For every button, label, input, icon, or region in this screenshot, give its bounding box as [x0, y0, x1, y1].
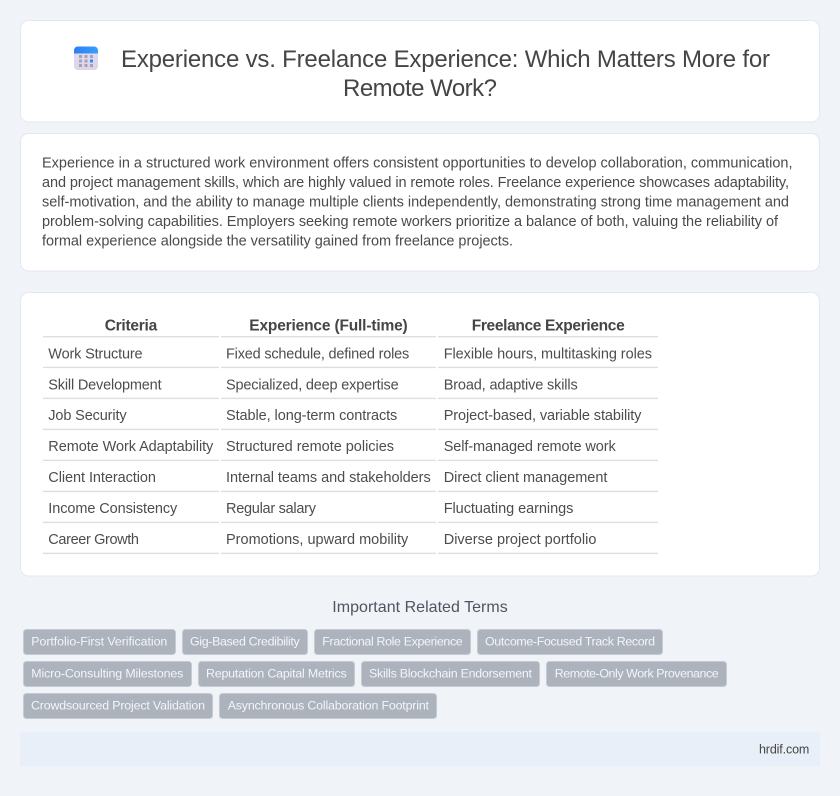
row: remote work adaptability: Remote Work Adaptability [48, 439, 214, 455]
row: client interaction: Client Interaction [48, 470, 156, 486]
row: work structure: Flexible hours, multitasking roles [444, 346, 652, 362]
row: work structure [43, 346, 658, 368]
row: work structure: Work Structure [48, 346, 143, 362]
row: career growth: Career Growth [48, 532, 139, 548]
text block: intro: and project management skills, which are highly valued in remote roles. Freelance experience showcases adaptability, [42, 175, 789, 191]
row: career growth: Promotions, upward mobility [226, 532, 409, 548]
row: income consistency: Fluctuating earnings [444, 501, 573, 517]
row: income consistency [43, 501, 658, 523]
title: Remote Work? [343, 75, 497, 102]
tag: asynchronous collaboration footprint [220, 694, 436, 718]
panel: intro paragraph [20, 134, 820, 271]
table header row: Criteria [105, 318, 158, 335]
text block: intro: self-motivation, and the ability to manage multiple clients independently, demonstrating strong time management and [42, 194, 789, 210]
panel: comparison table [20, 292, 820, 576]
text block: intro: Experience in a structured work environment offers consistent opportunities to develop collaboration, communication, [42, 156, 792, 172]
table header row: Experience (Full-time) [249, 318, 408, 335]
table header row [43, 318, 658, 337]
title [121, 46, 770, 102]
row: client interaction: Internal teams and stakeholders [226, 470, 431, 486]
row: client interaction: Direct client management [444, 470, 607, 486]
row: skill development [43, 377, 658, 399]
row: job security: Project-based, variable stability [444, 408, 642, 424]
row: work structure: Fixed schedule, defined roles [226, 346, 409, 362]
tag: crowdsourced project validation: Crowdsourced Project Validation [31, 699, 205, 713]
tag: micro-consulting milestones: Micro-Consulting Milestones [31, 667, 183, 681]
row: skill development: Broad, adaptive skills [444, 377, 578, 393]
tag: portfolio-first verification [24, 630, 176, 654]
tag: micro-consulting milestones [24, 662, 192, 686]
icon: calendar [74, 46, 98, 70]
tag: crowdsourced project validation [24, 694, 212, 718]
tag: gig-based credibility [182, 630, 308, 654]
row: job security [43, 408, 658, 430]
row: skill development: Specialized, deep expertise [226, 377, 399, 393]
table header row: Freelance Experience [472, 318, 625, 335]
tag: portfolio-first verification: Portfolio-First Verification [31, 635, 167, 649]
footer: hrdif.com [759, 742, 809, 756]
tag: remote-only work provenance: Remote-Only Work Provenance [555, 667, 719, 681]
tag: fractional role experience [314, 630, 470, 654]
tag: remote-only work provenance [546, 662, 726, 686]
tag: gig-based credibility: Gig-Based Credibility [190, 635, 300, 649]
row: income consistency: Regular salary [226, 501, 317, 517]
tag: reputation capital metrics: Reputation Capital Metrics [206, 667, 347, 681]
footer [20, 732, 820, 766]
row: remote work adaptability [43, 439, 658, 461]
text block: intro: formal experience alongside the versatility gained from freelance projects. [42, 234, 513, 250]
row: client interaction [43, 470, 658, 492]
row: remote work adaptability: Self-managed remote work [444, 439, 616, 455]
row: skill development: Skill Development [48, 377, 162, 393]
panel: related term tags [24, 630, 726, 718]
tag: reputation capital metrics [198, 662, 354, 686]
tag: outcome-focused track record [478, 630, 662, 654]
row: job security: Stable, long-term contracts [226, 408, 397, 424]
tag: fractional role experience: Fractional Role Experience [322, 635, 463, 649]
tag: outcome-focused track record: Outcome-Focused Track Record [485, 635, 655, 649]
tag: skills blockchain endorsement [362, 662, 540, 686]
heading: important related terms: Important Related Terms [332, 599, 508, 616]
row: remote work adaptability: Structured remote policies [226, 439, 394, 455]
row: career growth [43, 532, 658, 554]
row: income consistency: Income Consistency [48, 501, 178, 517]
text block: intro: problem-solving capabilities. Employers seeking remote workers prioritize a balance of both, valuing the reliability of [42, 214, 779, 230]
panel: header [20, 20, 820, 122]
tag: skills blockchain endorsement: Skills Blockchain Endorsement [369, 667, 533, 681]
row: career growth: Diverse project portfolio [444, 532, 596, 548]
title: Experience vs. Freelance Experience: Which Matters More for [121, 46, 770, 73]
row: job security: Job Security [48, 408, 127, 424]
text block: intro [42, 156, 792, 250]
tag: asynchronous collaboration footprint: Asynchronous Collaboration Footprint [228, 699, 430, 713]
